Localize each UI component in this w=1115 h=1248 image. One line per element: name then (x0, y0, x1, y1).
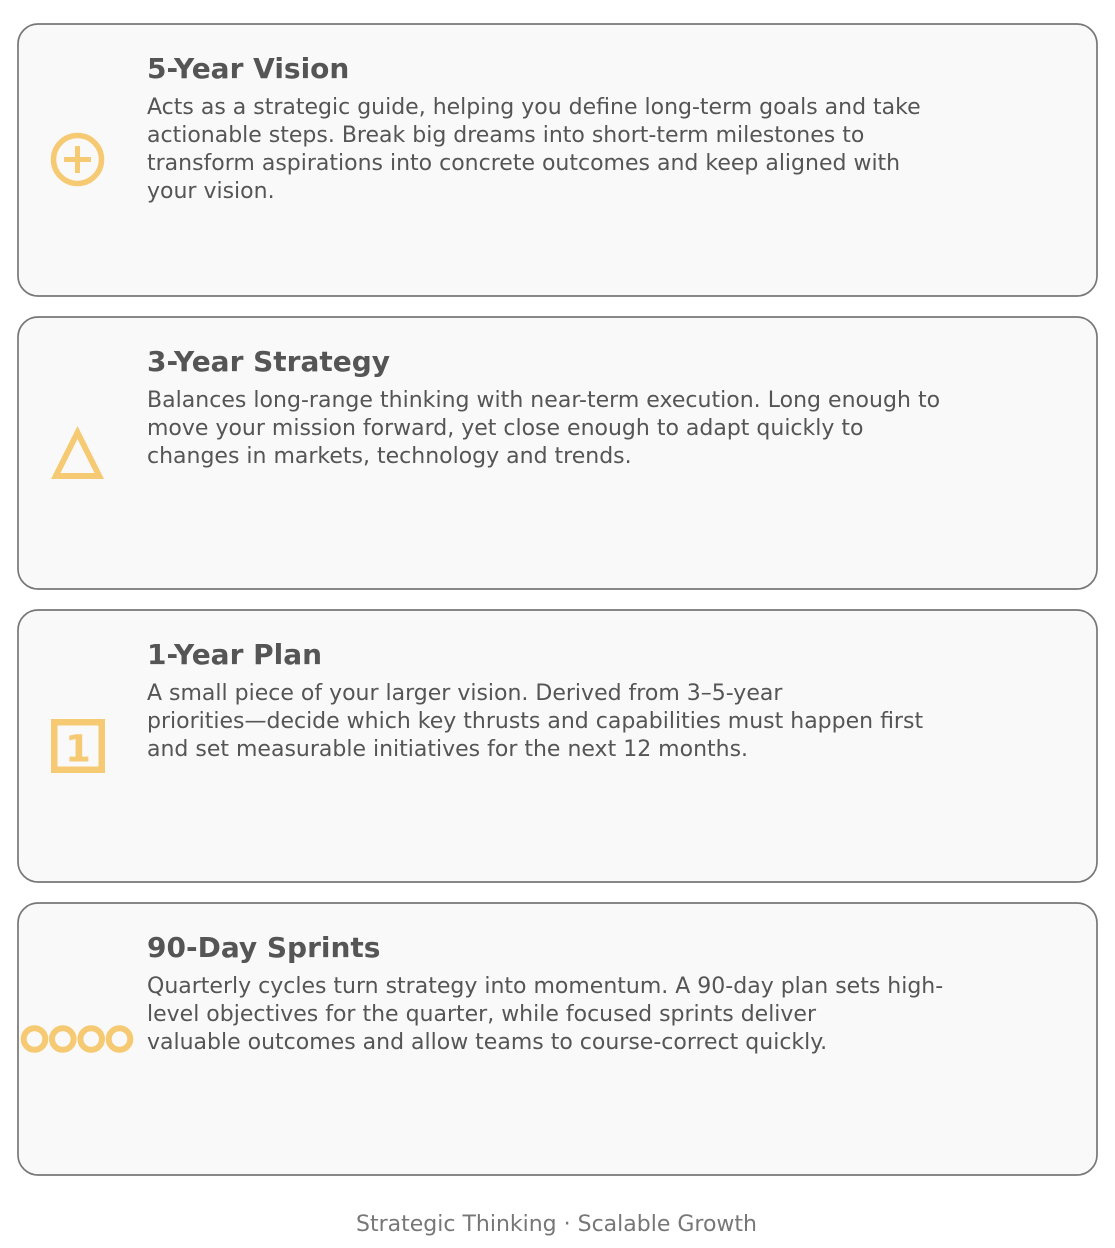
panel: 90-Day Sprints (18, 903, 1097, 1175)
text block: 5-Year Vision description: transform aspirations into concrete outcomes and keep aligned with (147, 151, 900, 176)
text block: 5-Year Vision description (147, 95, 921, 204)
icon: triangle (51, 426, 104, 479)
text block: 3-Year Strategy description: changes in markets, technology and trends. (147, 444, 632, 469)
heading: 3-Year Strategy: 3-Year Strategy (147, 345, 390, 378)
text block: 3-Year Strategy description: move your mission forward, yet close enough to adapt quickly to (147, 416, 863, 441)
text block: 90-Day Sprints description: Quarterly cycles turn strategy into momentum. A 90-day plan sets high- (147, 974, 943, 999)
text block: 90-Day Sprints description (147, 974, 943, 1055)
icon: four sprint circles (24, 1028, 130, 1050)
text block: 5-Year Vision description: your vision. (147, 179, 275, 204)
panel: 3-Year Strategy (18, 317, 1097, 589)
text block: 1-Year Plan description (147, 681, 923, 762)
text block: 5-Year Vision description: Acts as a strategic guide, helping you define long-term goals and take (147, 95, 921, 120)
heading: 90-Day Sprints: 90-Day Sprints (147, 931, 380, 964)
text block: 1-Year Plan description: priorities—decide which key thrusts and capabilities must happen first (147, 709, 923, 734)
heading: 5-Year Vision: 5-Year Vision (147, 52, 349, 85)
text block: 90-Day Sprints description: level objectives for the quarter, while focused sprints deliver (147, 1002, 817, 1027)
text block: 90-Day Sprints description: valuable outcomes and allow teams to course-correct quickly. (147, 1030, 827, 1055)
icon: numbered square: 1 (65, 728, 91, 770)
text block: 1-Year Plan description: A small piece of your larger vision. Derived from 3–5-year (147, 681, 783, 706)
panel: 5-Year Vision (18, 24, 1097, 296)
icon: numbered square (54, 722, 102, 770)
text block: 1-Year Plan description: and set measurable initiatives for the next 12 months. (147, 737, 748, 762)
heading: 1-Year Plan: 1-Year Plan (147, 638, 322, 671)
icon: circled plus (54, 136, 102, 184)
text block: 5-Year Vision description: actionable steps. Break big dreams into short-term milestones to (147, 123, 864, 148)
text block: 3-Year Strategy description: Balances long-range thinking with near-term execution. Long enough to (147, 388, 940, 413)
text block: 3-Year Strategy description (147, 388, 940, 469)
panel: 1-Year Plan (18, 610, 1097, 882)
footer tagline: Strategic Thinking · Scalable Growth (356, 1212, 757, 1237)
